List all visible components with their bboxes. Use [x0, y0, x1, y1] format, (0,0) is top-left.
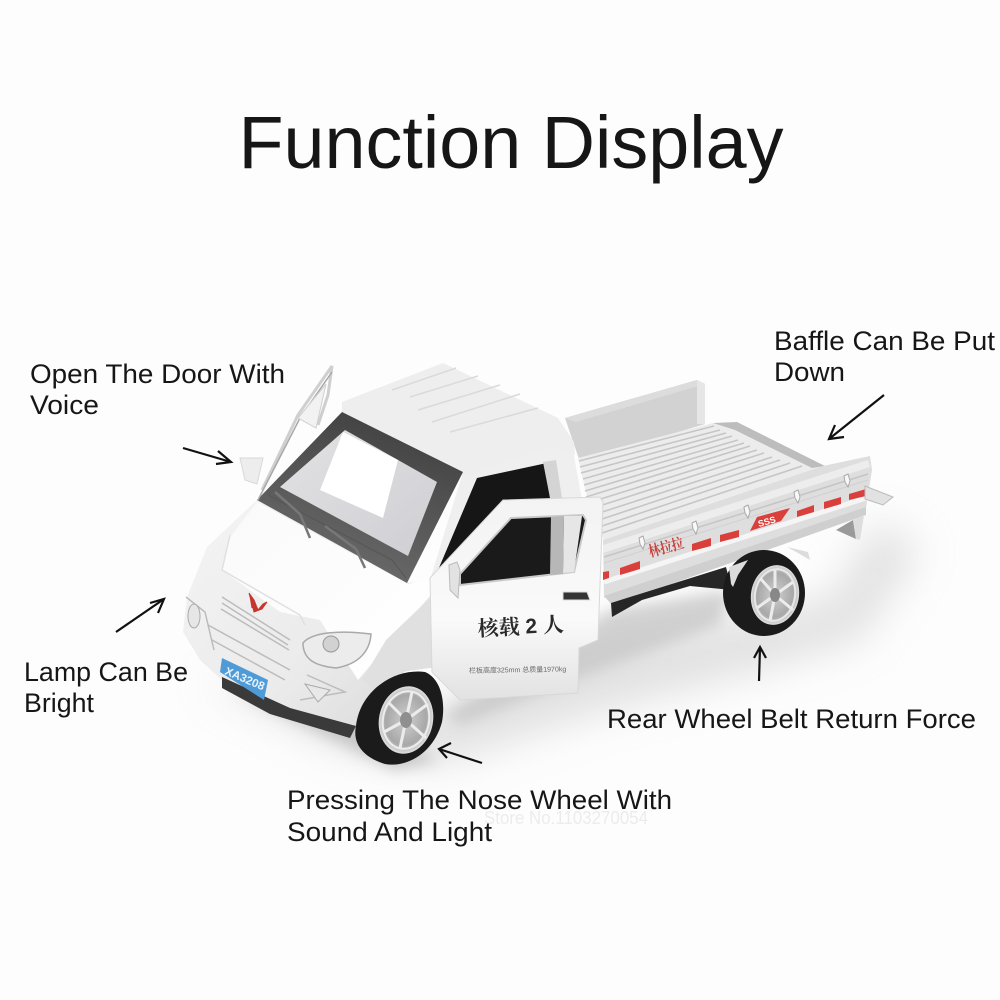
side mirror left — [240, 458, 263, 484]
watermark: Store No.1103270054 — [484, 808, 648, 828]
label: open the door: Open The Door With — [30, 359, 285, 389]
label: lamp — [24, 657, 188, 718]
label: rear wheel: Rear Wheel Belt Return Force — [607, 704, 976, 734]
front body — [183, 500, 432, 730]
label: nose wheel: Sound And Light — [287, 817, 493, 847]
license plate — [220, 658, 268, 700]
rear wheel — [723, 547, 810, 636]
mud flaps — [729, 560, 748, 587]
cargo bed: SSS — [757, 514, 777, 529]
arrow: to baffle — [829, 395, 884, 439]
raised left door — [258, 366, 332, 500]
fog lamp — [305, 684, 330, 702]
red logo — [249, 593, 267, 612]
arrow: to nose wheel — [439, 743, 482, 763]
door handle — [563, 592, 590, 600]
bed far side rail — [713, 422, 825, 468]
front wheel — [355, 672, 443, 765]
title: Function Display — [238, 101, 784, 184]
left side lamp — [188, 604, 200, 628]
grille — [186, 597, 345, 700]
door mirror — [449, 562, 460, 598]
label: baffle: Down — [774, 357, 845, 387]
side fender shade — [362, 596, 432, 692]
rear tail step — [865, 486, 893, 505]
bed headboard — [565, 380, 705, 462]
roof — [342, 363, 575, 475]
ground shadow — [200, 520, 920, 765]
cab rear pillar — [430, 440, 582, 600]
hood — [222, 502, 435, 680]
label: baffle — [774, 326, 995, 387]
bed near side panel — [603, 456, 872, 598]
headlight — [303, 632, 371, 668]
license plate: XA3208 — [223, 666, 267, 693]
cab body and hood — [183, 363, 582, 738]
door lettering: 核载 2 人 — [477, 614, 565, 641]
arrow: to door — [183, 448, 231, 464]
chassis underside — [611, 567, 732, 617]
arrow: to rear wheel — [754, 647, 766, 681]
label: lamp: Bright — [24, 688, 94, 718]
red lettering on bed: 林拉拉 — [646, 534, 686, 561]
cab door opening — [433, 463, 590, 600]
label: nose wheel: Pressing The Nose Wheel With — [287, 785, 672, 815]
label: baffle: Baffle Can Be Put — [774, 326, 995, 356]
arrow: to lamp — [116, 599, 164, 632]
label: open the door — [30, 359, 285, 420]
door window — [460, 515, 586, 585]
underside strip — [222, 677, 356, 738]
label: nose wheel — [287, 785, 672, 847]
bed clasps — [639, 474, 850, 549]
red stripes — [603, 489, 866, 580]
truck model photo illustration — [183, 363, 920, 770]
label: open the door: Voice — [30, 390, 99, 420]
door small print: 栏板高度325mm 总质量1970kg — [469, 664, 566, 675]
red badge on bed — [750, 508, 790, 531]
bed floor — [578, 423, 824, 540]
open door — [430, 497, 603, 700]
label: lamp: Lamp Can Be — [24, 657, 188, 687]
wipers — [275, 492, 365, 568]
windshield — [257, 412, 463, 583]
cargo bed — [565, 380, 893, 605]
